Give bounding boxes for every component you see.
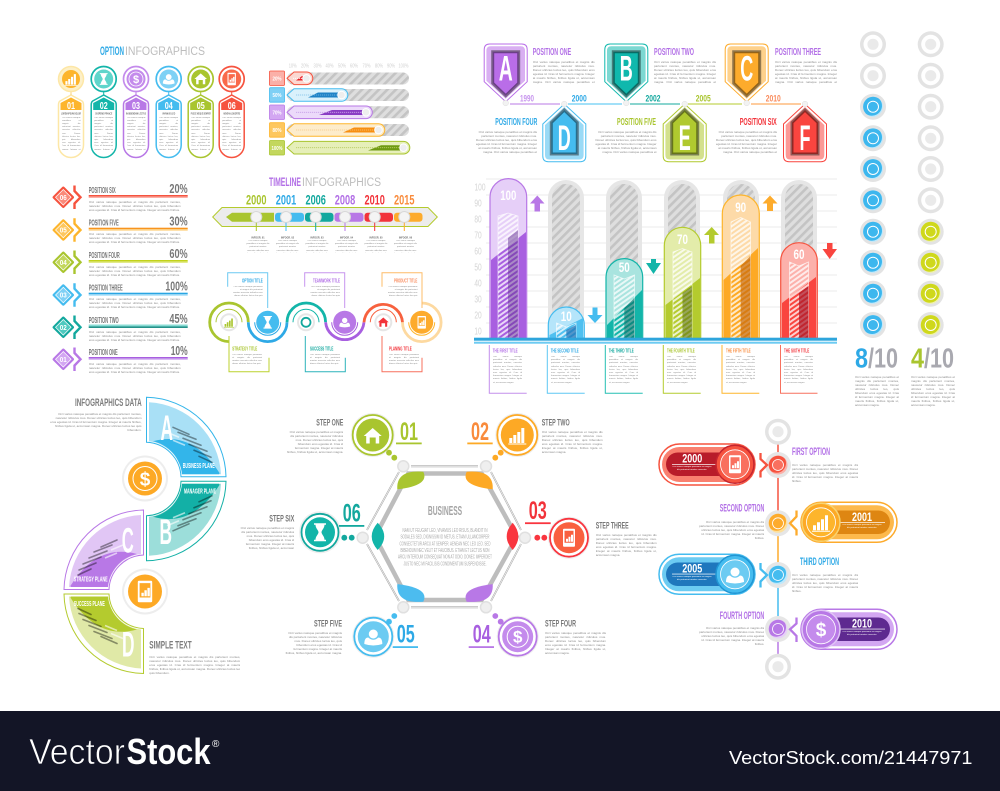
position five row (52, 214, 188, 245)
step three: STEP THREE (596, 520, 629, 530)
axis labels: 100% (398, 64, 409, 70)
position six row (52, 181, 188, 212)
badge D (475, 101, 586, 162)
sector C (64, 510, 144, 590)
sector B: MANAGER PLANE (184, 486, 216, 496)
box: product title: Orci varius natoque penatibus et magnis dis parturient montes nascetur ridiculus mus donec ultricies luctus leo quis (388, 286, 418, 297)
bar note 1 (489, 345, 527, 393)
rating column 8 of 10: Orci varius natoque penatibus et magnis dis parturient montes, nascetur ridiculus mus. Donec ultricies luctus leo, quis bibendum eros egestas id. Cras id fermentum magna. Integer at mauris finibus, finibus ligula ut, accumsan magna. (855, 374, 899, 407)
timeline notes: INFOGR. 05 (370, 236, 383, 240)
wave node 1 (220, 313, 238, 331)
option card 01 (58, 66, 84, 158)
axis labels: 40% (326, 64, 334, 70)
step four: $ (513, 628, 523, 647)
hexagon nodes (357, 461, 530, 613)
option card 05: 05 (197, 101, 205, 112)
step one: STEP ONE (316, 418, 343, 428)
step four: 04 (473, 621, 491, 649)
position four row (52, 246, 188, 278)
years: 2002 (646, 93, 660, 104)
y axis labels: 50 (474, 262, 482, 274)
position six row: Orci varius natoque penatibus et magnis dis parturient montes, nascetur ridiculus mus. Donec ultricies luctus leo, quis bibendum eros egestas id. Cras id fermentum magna. Integer at mauris finibus. (89, 200, 181, 212)
position three row: Orci varius natoque penatibus et magnis dis parturient montes, nascetur ridiculus mus. Donec ultricies luctus leo, quis bibendum eros egestas id. Cras id fermentum magna. Integer at mauris finibus. (89, 297, 181, 309)
option card 03: 03 (132, 101, 140, 112)
badge C: C (740, 50, 753, 88)
years: 2000 (572, 93, 587, 104)
step five: 05 (397, 621, 415, 649)
position one row: 10% (171, 343, 188, 358)
option 2000: FIRST OPTION (792, 446, 830, 458)
step two: Orci varius natoque penatibus et magnis dis parturient montes, nascetur ridiculus mus. Donec ultricies luctus leo, quis bibendum eros egestas id. Cras id fermentum magna. Integer at mauris finibus, finibus ligula ut, accumsan magna. (542, 430, 603, 454)
bar note 6 (780, 345, 818, 393)
rating column 8 of 10: 8 (855, 343, 868, 374)
timeline years: 2001 (276, 193, 297, 208)
panel: wave process (210, 273, 441, 372)
progress row 70%: 70% (272, 110, 282, 116)
end nodes (765, 419, 791, 680)
option card 01: 01 (67, 101, 75, 112)
option 2010: FOURTH OPTION (720, 610, 764, 622)
step one: Orci varius natoque penatibus et magnis dis parturient montes, nascetur ridiculus mus. Donec ultricies luctus leo, quis bibendum eros egestas id. Cras id fermentum magna. Integer at mauris finibus, finibus ligula ut, accumsan magna. (287, 430, 343, 454)
badge A: A (499, 50, 513, 88)
option card 06: AENEAN LOBORTIS (223, 112, 240, 116)
bar 100 (490, 179, 527, 338)
box: option title: OPTION TITLE (242, 279, 263, 285)
option 2010: $ (816, 620, 827, 641)
bar 60: 60 (794, 247, 804, 262)
option card 02: SUSPEND PRANCE (95, 112, 112, 116)
hexagon leaves (372, 471, 518, 602)
rating column 4 of 10: 4 (911, 343, 924, 374)
axis labels: 90% (387, 64, 395, 70)
progress row 70% (270, 105, 409, 120)
position one row: POSITION ONE (89, 348, 118, 357)
position two row: POSITION TWO (89, 316, 119, 325)
bar note 4: Orci varius natoque penatibus et magnis dis parturient montes, nascetur ridiculus mus. Donec ultricies luctus leo, quis bibendum eros egestas id. Cras id fermentum magna. Integer at mauris finibus, finibus ligula ut, accumsan magna. (667, 356, 696, 384)
sector D: SUCCESS PLANE (74, 599, 105, 608)
axis labels: 80% (375, 64, 383, 70)
text block: simple text: SIMPLE TEXT (149, 639, 192, 651)
timeline notes (245, 223, 418, 253)
years: 2010 (766, 93, 781, 104)
option node markers (765, 452, 791, 642)
box: product title: PRODUCT TITLE (394, 279, 417, 285)
heading: timeline infographics (269, 175, 381, 189)
box: strategy title: STRATEGY TITLE (232, 347, 257, 353)
position five row: POSITION FIVE (89, 218, 119, 228)
position six row: POSITION SIX (89, 186, 116, 195)
panel: option infographics (58, 44, 244, 158)
chart: progress bars (270, 64, 410, 155)
box: option title (228, 273, 268, 308)
badge E: E (679, 119, 691, 158)
option 2001: SECOND OPTION (720, 503, 764, 515)
step four: STEP FOUR (545, 619, 576, 629)
box: success title (305, 336, 345, 372)
box: success title: Orci varius natoque penatibus et magnis dis parturient montes nascetur ridiculus mus donec ultricies luctus leo quis (310, 354, 340, 365)
footer image id: VectorStock.com/21447971 (729, 747, 972, 768)
badge F (715, 101, 826, 162)
bar note 5 (722, 345, 759, 393)
y axis labels: 70 (474, 230, 482, 242)
heading: timeline infographics: TIMELINE (269, 175, 301, 189)
bar note 2: Orci varius natoque penatibus et magnis dis parturient montes, nascetur ridiculus mus. Donec ultricies luctus leo, quis bibendum eros egestas id. Cras id fermentum magna. Integer at mauris finibus, finibus ligula ut, accumsan magna. (551, 356, 580, 384)
box: product title (382, 273, 422, 308)
y axis labels: 30 (474, 294, 482, 306)
bar note 1: THE FIRST TITLE (493, 348, 518, 354)
icon: dollar coin: $ (140, 470, 151, 490)
panel: rating dots (855, 31, 955, 413)
center text: JUSTO NEC MI FACILISIS CONDIMENTUM SUSPENDISSE. (404, 561, 486, 567)
option 2000 (659, 444, 858, 485)
bar 70: 70 (677, 232, 688, 247)
badge E: POSITION FIVE (617, 117, 656, 128)
years: 1990 (520, 93, 534, 104)
badge D: D (558, 119, 571, 158)
sector D (64, 594, 144, 674)
center text (398, 503, 492, 567)
box: teamwork title (305, 273, 345, 308)
timeline years: 2008 (335, 193, 356, 208)
timeline years: 2015 (394, 193, 415, 208)
y axis labels: 60 (474, 246, 482, 258)
progress row 50% (270, 88, 409, 102)
panel: hexagon business (240, 413, 657, 658)
position five row: 30% (169, 214, 188, 229)
option card 03: IN BIBENDUM LECTUS (126, 112, 146, 116)
rating column 4 of 10 (911, 31, 955, 413)
option card 04: 04 (165, 101, 173, 112)
heading: infographics data: Orci varius natoque penatibus et magnis dis parturient montes, nascetur ridiculus mus. Donec ultricies luctus leo, quis bibendum eros egestas id. Cras id fermentum magna. Integer at mauris finibus, finibus ligula ut, accumsan magna. Donec ultricies luctus leo quis bibendum. (50, 412, 142, 432)
bar note 4 (663, 345, 701, 393)
option 2000: 2000 (682, 454, 702, 466)
box: planing title (382, 336, 422, 372)
axis labels: 10% (289, 64, 297, 70)
progress row 20% (270, 71, 409, 86)
position four row: Orci varius natoque penatibus et magnis dis parturient montes, nascetur ridiculus mus. Donec ultricies luctus leo, quis bibendum eros egestas id. Cras id fermentum magna. Integer at mauris finibus. (89, 264, 181, 277)
wave line (210, 303, 441, 342)
bar note 5: THE FIFTH TITLE (726, 348, 751, 354)
badge B (605, 44, 716, 106)
badge E (594, 101, 706, 162)
step four (469, 613, 606, 658)
bar note 4: THE FOURTH TITLE (667, 348, 695, 354)
option card 01: LOREM IPSUM DOLOR (61, 112, 81, 116)
step five (285, 613, 418, 658)
panel: lettered timeline (475, 44, 837, 162)
timeline years: 2010 (364, 193, 385, 208)
badge C (725, 44, 837, 106)
wave node 5 (374, 313, 392, 331)
box: teamwork title: Orci varius natoque penatibus et magnis dis parturient montes nascetur ridiculus mus donec ultricies luctus leo quis (310, 286, 340, 297)
progress row 80%: 80% (272, 128, 282, 134)
position three row: 03 (60, 290, 67, 300)
option card 06 (219, 66, 244, 158)
badge A (484, 44, 595, 106)
position one row (52, 343, 188, 374)
y axis labels: 20 (474, 310, 482, 322)
position three row (52, 279, 188, 310)
axis labels: 70% (362, 64, 371, 70)
sector C: STRATEGY PLANE (74, 574, 108, 584)
center text: SODALES SED, DIGNISSIM ID METUS. ETIAM ULLAMCORPER (400, 535, 490, 541)
badge C: POSITION THREE (775, 47, 821, 58)
progress row 100%: 100% (272, 146, 283, 152)
timeline notes: INFOGR. 04 (340, 236, 353, 240)
step two (467, 413, 603, 461)
footer logo (29, 731, 220, 772)
option 2001: 2001 (852, 512, 872, 524)
center text: BIBENDUM NEC VELIT ET FAUCIBUS. ETIAM ET LECTUS NON (400, 548, 490, 554)
years (520, 93, 781, 104)
position five row: 05 (60, 226, 67, 234)
rating column 4 of 10: Orci varius natoque penatibus et magnis dis parturient montes, nascetur ridiculus mus. Donec ultricies luctus leo, quis bibendum eros egestas id. Cras id fermentum magna. Integer at mauris finibus, finibus ligula ut, accumsan magna. (911, 374, 955, 407)
position five row: Orci varius natoque penatibus et magnis dis parturient montes, nascetur ridiculus mus. Donec ultricies luctus leo, quis bibendum eros egestas id. Cras id fermentum magna. Integer at mauris finibus. (89, 232, 181, 244)
sector A: BUSINESS PLANE (183, 461, 215, 470)
option 2005: 2005 (682, 563, 703, 575)
wave node 4 (333, 311, 356, 334)
bar 60 (781, 243, 817, 338)
progress row 80% (270, 123, 409, 137)
step five: Orci varius natoque penatibus et magnis dis parturient montes, nascetur ridiculus mus. Donec ultricies luctus leo, quis bibendum eros egestas id. Cras id fermentum magna. Integer at mauris finibus, finibus ligula ut, accumsan magna. (286, 631, 342, 655)
option card 02 (91, 66, 116, 158)
rating column 8 of 10: /10 (868, 343, 898, 374)
y axis labels: 10 (474, 326, 482, 338)
axis labels: 20% (301, 64, 309, 70)
option 2010: 2010 (852, 618, 872, 630)
heading: infographics data (50, 397, 142, 432)
option card 03 (124, 66, 148, 158)
box: option title: Orci varius natoque penatibus et magnis dis parturient montes nascetur ridiculus mus donec ultricies luctus leo quis (233, 286, 263, 297)
position four row: 60% (169, 246, 188, 261)
position two row: 02 (60, 323, 67, 332)
box: success title: SUCCESS TITLE (310, 347, 333, 353)
option 2001: Orci varius natoque penatibus et magnis dis parturient montes nascetur. (842, 524, 882, 529)
timeline years (246, 193, 415, 208)
position two row (52, 311, 188, 342)
position six row: 06 (60, 193, 67, 202)
footer logo: Vector (29, 731, 125, 772)
step three (525, 497, 657, 559)
wave node 2 (256, 311, 279, 334)
sector A: A (160, 409, 173, 448)
step six: 06 (343, 500, 361, 528)
badge B: B (620, 50, 633, 88)
sector C: C (122, 521, 134, 560)
bar 10 (548, 307, 584, 338)
panel: position list (52, 181, 188, 374)
center text: NAM UT FEUGIAT LEO, VIVAMUS LEO RISUS, BLANDIT IN (402, 528, 488, 534)
badge F: F (800, 119, 810, 158)
badge A: POSITION ONE (533, 47, 571, 58)
option 2010: Orci varius natoque penatibus et magnis dis parturient montes nascetur. (842, 630, 882, 636)
option card 05 (188, 66, 213, 158)
sector A (146, 397, 226, 477)
panel: timeline infographics (213, 175, 437, 253)
box: planing title: PLANING TITLE (389, 347, 412, 353)
option 2005: Orci varius natoque penatibus et magnis dis parturient montes, nascetur ridiculus mus. Donec ultricies luctus leo, quis bibendum eros egestas id. Cras id fermentum magna. Integer at mauris finibus. (792, 572, 858, 593)
trend arrows (530, 196, 837, 323)
option card 04 (156, 66, 181, 158)
position one row: 01 (60, 355, 67, 364)
baseline (474, 338, 837, 344)
icon: dollar coin (122, 456, 168, 502)
wave node 6 (410, 311, 433, 334)
grid lines (486, 179, 837, 323)
option card 06: 06 (228, 101, 236, 112)
step three: Orci varius natoque penatibus et magnis dis parturient montes, nascetur ridiculus mus. Donec ultricies luctus leo, quis bibendum eros egestas id. Cras id fermentum magna. Integer at mauris finibus, finibus ligula ut, accumsan magna. (596, 533, 657, 557)
badge B: POSITION TWO (654, 47, 694, 58)
position three row: POSITION THREE (89, 284, 123, 292)
bar note 6: Orci varius natoque penatibus et magnis dis parturient montes, nascetur ridiculus mus. Donec ultricies luctus leo, quis bibendum eros egestas id. Cras id fermentum magna. Integer at mauris finibus, finibus ligula ut, accumsan magna. (784, 356, 813, 384)
box: planing title: Orci varius natoque penatibus et magnis dis parturient montes nascetur ridiculus mus donec ultricies luctus leo quis (389, 354, 419, 365)
option 2001: Orci varius natoque penatibus et magnis dis parturient montes, nascetur ridiculus mus. Donec ultricies luctus leo, quis bibendum eros egestas id. Cras id fermentum magna. Integer at mauris finibus. (699, 520, 764, 540)
option 2000: Orci varius natoque penatibus et magnis dis parturient montes, nascetur ridiculus mus. Donec ultricies luctus leo, quis bibendum eros egestas id. Cras id fermentum magna. Integer at mauris finibus. (792, 462, 858, 483)
rating column 4 of 10: /10 (924, 343, 954, 374)
heading: timeline infographics: INFOGRAPHICS (302, 177, 381, 189)
progress row 50%: 50% (272, 93, 282, 99)
timeline notes: INFOGR. 02 (281, 236, 294, 240)
empty tracks (550, 182, 815, 338)
timeline bar (213, 208, 437, 226)
badge D: POSITION FOUR (495, 117, 538, 128)
step three: 03 (529, 497, 547, 525)
bar note 3: THE THIRD TITLE (609, 348, 634, 354)
bar note 2 (547, 345, 585, 393)
progress row 20%: 20% (272, 76, 282, 82)
rating column 8 of 10 (855, 31, 899, 413)
center text: CONSECTETUR ARCU AT SEMPER. AENEAN NEC LEO LEO. SED (400, 541, 491, 547)
position two row: Orci varius natoque penatibus et magnis dis parturient montes, nascetur ridiculus mus. Donec ultricies luctus leo, quis bibendum eros egestas id. Cras id fermentum magna. Integer at mauris finibus. (89, 330, 181, 342)
timeline notes: INFOGR. 01 (252, 236, 265, 240)
position three row: 100% (165, 279, 188, 294)
box: teamwork title: TEAMWORK TITLE (313, 279, 340, 285)
bar 100: 100 (500, 188, 516, 203)
sector B (146, 481, 226, 561)
timeline notes: INFOGR. 06 (399, 236, 412, 240)
axis labels (289, 64, 409, 70)
bar 90: 90 (735, 200, 746, 215)
y axis labels: 90 (474, 198, 482, 210)
panel: S-shaped infographics data (50, 397, 240, 674)
step four: Orci varius natoque penatibus et magnis dis parturient montes, nascetur ridiculus mus. Donec ultricies luctus leo, quis bibendum eros egestas id. Cras id fermentum magna. Integer at mauris finibus, finibus ligula ut, accumsan magna. (545, 631, 606, 655)
heading: option infographics: OPTION (100, 44, 124, 58)
position six row: 20% (169, 181, 188, 196)
wave node 3 (297, 313, 315, 331)
bar note 1: Orci varius natoque penatibus et magnis dis parturient montes, nascetur ridiculus mus. Donec ultricies luctus leo, quis bibendum eros egestas id. Cras id fermentum magna. Integer at mauris finibus, finibus ligula ut, accumsan magna. (493, 356, 522, 384)
sector B: B (159, 513, 172, 552)
box: strategy title (229, 336, 269, 372)
panel: vertical options timeline (659, 419, 897, 680)
position four row: POSITION FOUR (89, 251, 120, 260)
bar 10: 10 (561, 309, 572, 324)
bar chart (474, 179, 837, 393)
y axis labels: 100 (474, 182, 486, 194)
text block: simple text (149, 639, 240, 674)
timeline notes: INFOGR. 03 (310, 236, 324, 240)
option card 05: FUSCE NEQUE SEMPER (191, 112, 211, 116)
y axis labels: 80 (474, 214, 482, 226)
step five: STEP FIVE (314, 619, 342, 629)
panel: footer band (0, 711, 1000, 791)
option 2005: Orci varius natoque penatibus et magnis dis parturient montes nascetur. (672, 576, 712, 581)
progress row 100% (270, 140, 410, 155)
icon: phone coin (122, 568, 168, 614)
position four row: 04 (60, 258, 67, 267)
bar 50: 50 (619, 260, 630, 275)
option card 02: 02 (100, 101, 108, 112)
timeline years: 2006 (305, 193, 326, 208)
step one: 01 (400, 418, 418, 446)
sector D: D (122, 626, 135, 665)
position one row: Orci varius natoque penatibus et magnis dis parturient montes, nascetur ridiculus mus. Donec ultricies luctus leo, quis bibendum eros egestas id. Cras id fermentum magna. Integer at mauris finibus. (89, 362, 181, 374)
connector line (510, 103, 801, 105)
bar note 3: Orci varius natoque penatibus et magnis dis parturient montes, nascetur ridiculus mus. Donec ultricies luctus leo, quis bibendum eros egestas id. Cras id fermentum magna. Integer at mauris finibus, finibus ligula ut, accumsan magna. (609, 356, 638, 384)
step two: STEP TWO (542, 418, 570, 428)
bar note 5: Orci varius natoque penatibus et magnis dis parturient montes, nascetur ridiculus mus. Donec ultricies luctus leo, quis bibendum eros egestas id. Cras id fermentum magna. Integer at mauris finibus, finibus ligula ut, accumsan magna. (726, 356, 755, 384)
bar 90 (722, 195, 759, 338)
option 2010: Orci varius natoque penatibus et magnis dis parturient montes, nascetur ridiculus mus. Donec ultricies luctus leo, quis bibendum eros egestas id. Cras id fermentum magna. Integer at mauris finibus. (699, 626, 764, 646)
bar note 2: THE SECOND TITLE (551, 348, 579, 354)
hexagon frame (367, 466, 521, 607)
heading: infographics data: INFOGRAPHICS DATA (75, 397, 142, 409)
vertical line (777, 442, 779, 657)
heading: option infographics: INFOGRAPHICS (125, 46, 205, 58)
badge F: POSITION SIX (740, 117, 777, 128)
position two row: 45% (169, 311, 188, 326)
footer logo: ® (212, 739, 220, 750)
y axis labels (474, 182, 486, 338)
bar note 3 (605, 345, 643, 393)
option 2001 (698, 502, 897, 542)
years: 2005 (696, 93, 711, 104)
heading: option infographics (100, 44, 205, 58)
center text: ARCU INTERDUM CONSEQUAT NON AT ODIO. DONEC IMPERDIET (398, 555, 492, 561)
option card 04: VIVAMUS LEO (162, 112, 176, 116)
option 2010 (698, 609, 897, 649)
bar 50 (606, 259, 643, 338)
text block: simple text: Orci varius natoque penatibus et magnis dis parturient montes, nascetur ridiculus mus. Donec ultricies luctus leo, quis bibendum eros egestas id. Cras id fermentum magna. Integer at mauris finibus, finibus ligula ut, accumsan magna. Donec ultricies luctus leo quis bibendum. (149, 654, 240, 674)
option 2005: THIRD OPTION (800, 556, 839, 568)
step one (287, 413, 422, 461)
step six (240, 500, 364, 553)
option 2005 (659, 554, 858, 594)
step two: 02 (471, 418, 489, 446)
center text: BUSINESS (428, 503, 462, 518)
box: strategy title: Orci varius natoque penatibus et magnis dis parturient montes nascetur ridiculus mus donec ultricies luctus leo quis (232, 354, 262, 365)
step six: STEP SIX (269, 514, 295, 524)
option 2000: Orci varius natoque penatibus et magnis dis parturient montes nascetur. (672, 466, 712, 471)
option card 03: $ (133, 74, 139, 86)
axis labels: 30% (314, 64, 322, 70)
bar note 6: THE SIXTH TITLE (784, 348, 809, 354)
axis labels: 50% (338, 64, 346, 70)
y axis labels: 40 (474, 278, 482, 290)
bar 70 (664, 227, 701, 338)
footer logo: Stock (126, 731, 211, 772)
axis labels: 60% (350, 64, 358, 70)
timeline years: 2000 (246, 193, 267, 208)
